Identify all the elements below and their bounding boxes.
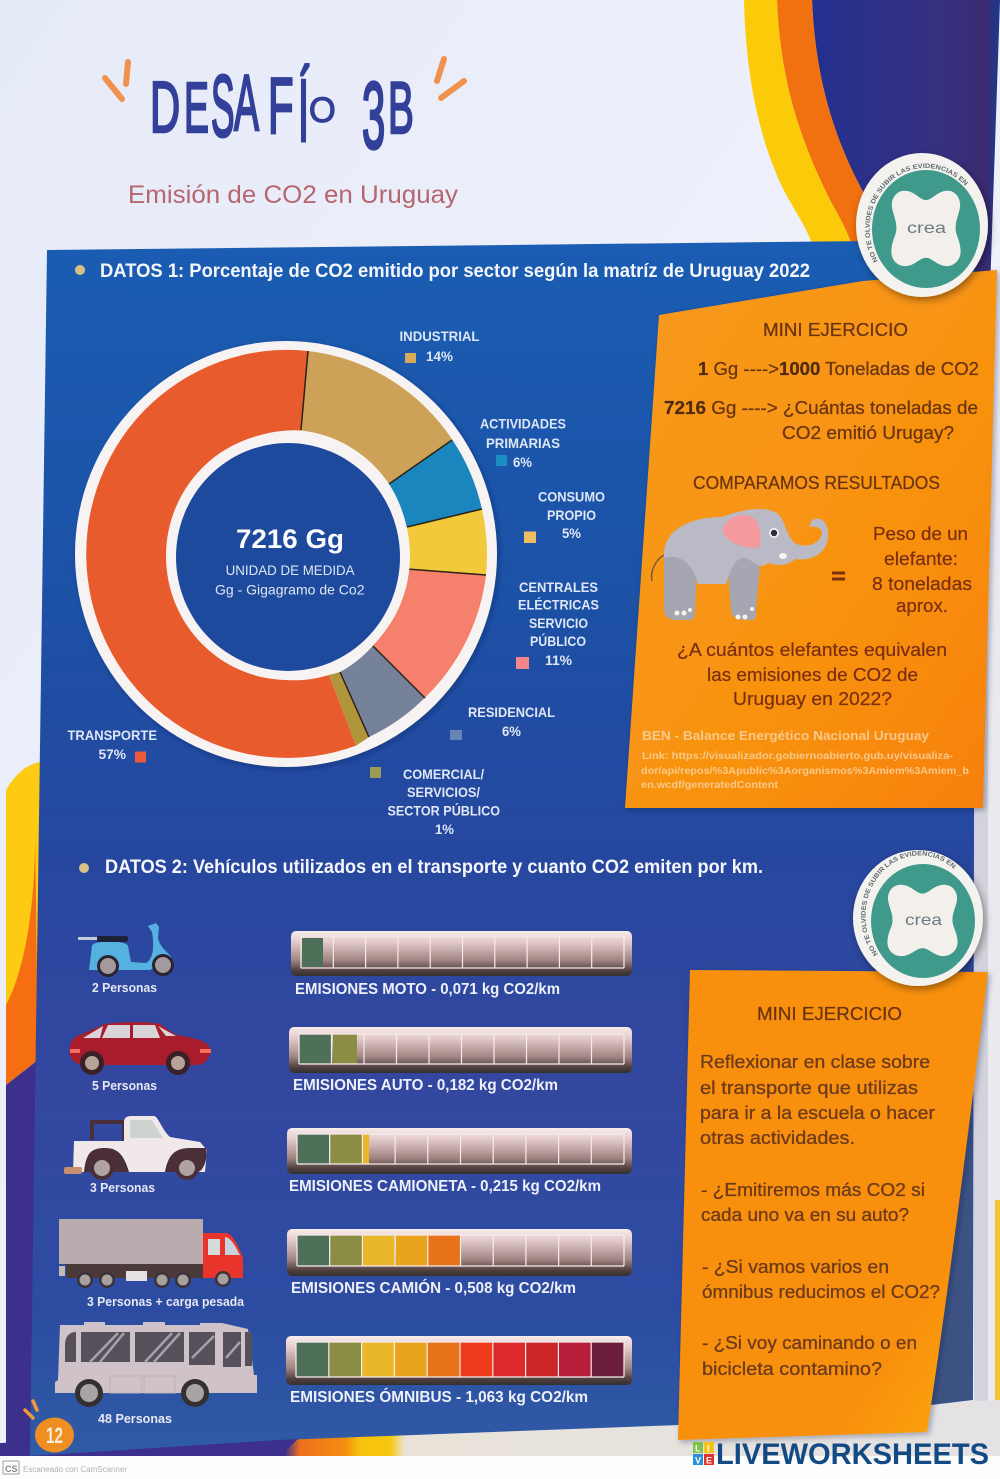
legend: residencial [450,704,555,740]
title: O [309,92,336,130]
legend: actividades primarias: 6% [513,454,533,470]
heading: MINI EJERCICIO [757,1003,902,1024]
legend: centrales eléctricas: ELÉCTRICAS [518,596,599,612]
badge: crea 1: crea [907,220,946,237]
question: 7216 Gg ----> ¿Cuántas toneladas de [664,397,978,418]
scanner mark: Escaneado con CamScanner [23,1465,127,1474]
title: B [388,68,414,149]
panel: mini ejercicio 1: 8 toneladas [872,573,972,594]
panel: mini ejercicio 2: para ir a la escuela o hacer [700,1103,935,1123]
slice: industrial [301,351,452,484]
legend: comercial: 1% [435,821,455,837]
elephants question: ¿A cuántos elefantes equivalen [677,639,947,660]
bar: camioneta [287,1128,632,1195]
bar: camioneta: EMISIONES CAMIONETA - 0,215 kg CO2/km [289,1178,601,1195]
equals sign [832,573,845,579]
legend: comercial [370,766,500,837]
icon: elephant [652,509,828,620]
legend: comercial: COMERCIAL/ [403,766,484,782]
legend: transporte [68,727,157,762]
slice: comercial [329,672,369,746]
title: E [184,68,209,148]
question: auto: - ¿Emitiremos más CO2 si [701,1180,925,1200]
logo: liveworksheets: V [695,1456,701,1466]
badge: crea 2: NO TE OLVIDES DE SUBIR LAS EVIDENCIAS EN [861,850,956,956]
panel: mini ejercicio 2 [678,970,988,1440]
legend: residencial: 6% [502,723,522,739]
legend: consumo propio: CONSUMO [538,488,605,504]
vehicle: moto [78,923,174,995]
legend: transporte: 57% [98,746,127,762]
vehicle: ómnibus [55,1322,257,1426]
bar: camión: EMISIONES CAMIÓN - 0,508 kg CO2/km [291,1278,576,1297]
legend: residencial: RESIDENCIAL [468,704,555,720]
title: A [234,60,259,148]
title: D [150,66,180,148]
conversion: 1 Gg ---->1000 Toneladas de CO2 [698,358,979,379]
legend: centrales eléctricas: 11% [545,652,573,668]
panel: mini ejercicio 1: Uruguay en 2022? [733,688,892,709]
panel: mini ejercicio 1: elefante: [884,548,958,569]
slice: actividades primarias [389,440,482,527]
chart: donut of CO2 by sector [75,341,497,767]
title: S [211,59,234,156]
legend: consumo propio: PROPIO [547,507,596,523]
panel: mini ejercicio 2: ómnibus reducimos el CO2? [702,1282,940,1302]
center caption: UNIDAD DE MEDIDA [226,562,355,578]
vehicle: camión: 3 Personas + carga pesada [87,1295,245,1309]
legend: industrial [400,328,480,364]
bar: auto [289,1027,632,1094]
panel: mini ejercicio 2: otras actividades. [700,1128,855,1148]
legend: consumo propio [524,488,605,543]
page number [35,1418,74,1452]
legend: centrales eléctricas [516,579,599,669]
link: Link: https://visualizador.gobiernoabierto.gub.uy/visualiza- [642,750,954,762]
slice: residencial [340,646,425,737]
question: ómnibus: - ¿Si vamos varios en [702,1257,889,1277]
title: Í [298,62,309,160]
reflection text: Reflexionar en clase sobre [700,1052,930,1072]
panel: mini ejercicio 1: en.wcdf/generatedContent [641,779,779,791]
panel: mini ejercicio 2: cada uno va en su auto? [701,1205,909,1225]
panel: mini ejercicio 1: CO2 emitió Urugay? [782,422,954,443]
logo: liveworksheets: E [706,1456,712,1466]
slice: transporte [86,350,356,758]
decoration: page number sparks [25,1401,37,1418]
elephant weight: Peso de un [873,523,968,544]
panel: blue background [30,241,975,1456]
vehicle: camioneta: 3 Personas [90,1181,155,1195]
bar: ómnibus [286,1336,632,1406]
title [150,59,414,169]
title: F [268,63,294,151]
scanner mark: CS [5,1464,18,1474]
panel: mini ejercicio 1: las emisiones de CO2 de [707,664,918,685]
legend: actividades primarias [480,416,566,470]
vehicle: auto [69,1022,211,1093]
logo: liveworksheets: I [707,1444,710,1454]
bar: moto: EMISIONES MOTO - 0,071 kg CO2/km [295,981,560,998]
badge: crea 2: crea [905,912,942,929]
center value: 7216 Gg [236,524,344,554]
logo: liveworksheets: LIVEWORKSHEETS [716,1438,989,1471]
vehicle: ómnibus: 48 Personas [98,1412,172,1426]
panel: mini ejercicio 2: bicicleta contamino? [702,1359,882,1379]
vehicle: camioneta [64,1116,207,1195]
vehicle: auto: 5 Personas [92,1079,157,1093]
subtitle: Emisión de CO2 en Uruguay [128,181,459,209]
question: bicicleta: - ¿Si voy caminando o en [702,1333,917,1353]
panel: mini ejercicio 1: aprox. [896,595,948,616]
panel: mini ejercicio 1 [625,270,997,808]
legend: consumo propio: 5% [562,525,582,541]
legend: actividades primarias: PRIMARIAS [486,435,560,451]
slice: centrales eléctricas [373,569,486,698]
logo: liveworksheets: L [695,1444,701,1454]
legend: centrales eléctricas: CENTRALES [519,579,598,595]
chart: donut of CO2 by sector: Gg - Gigagramo de Co2 [215,582,365,598]
legend: industrial: INDUSTRIAL [400,328,480,344]
vehicle: camión [59,1219,245,1309]
bar: ómnibus: EMISIONES ÓMNIBUS - 1,063 kg CO2/km [290,1387,588,1406]
heading: MINI EJERCICIO [763,319,908,340]
title: 3 [362,64,385,169]
scanner mark [3,1461,127,1474]
panel: mini ejercicio 2: el transporte que utilizas [700,1078,918,1098]
badge: crea 1: NO TE OLVIDES DE SUBIR LAS EVIDENCIAS EN [865,163,968,263]
vehicle: moto: 2 Personas [92,981,157,995]
legend: centrales eléctricas: SERVICIO [529,615,588,631]
slice: consumo propio [407,510,487,575]
legend: comercial: SECTOR PÚBLICO [388,802,500,818]
legend: transporte: TRANSPORTE [68,727,157,743]
source: BEN - Balance Energético Nacional Uruguay [642,728,930,743]
bar: moto [291,931,632,998]
legend: centrales eléctricas: PÚBLICO [530,632,586,649]
subheading: COMPARAMOS RESULTADOS [693,472,940,493]
center disc [176,443,400,671]
legend: industrial: 14% [426,348,454,364]
legend: actividades primarias: ACTIVIDADES [480,416,566,432]
decoration: title sparks [105,59,464,99]
heading: datos 2: DATOS 2: Vehículos utilizados en el transporte y cuanto CO2 emiten por km. [105,857,763,878]
legend: comercial: SERVICIOS/ [407,784,480,800]
page number: 12 [46,1423,63,1448]
bar: auto: EMISIONES AUTO - 0,182 kg CO2/km [293,1077,558,1094]
bar: camión [287,1229,632,1297]
badge: crea 2 [851,849,990,994]
panel: mini ejercicio 1: dor/api/repos/%3Apublic%3Aorganismos%3Amiem%3Amiem_b [641,765,969,777]
badge: crea 1 [853,152,995,305]
heading: datos 1: DATOS 1: Porcentaje de CO2 emitido por sector según la matríz de Uruguay 2022 [100,261,810,282]
